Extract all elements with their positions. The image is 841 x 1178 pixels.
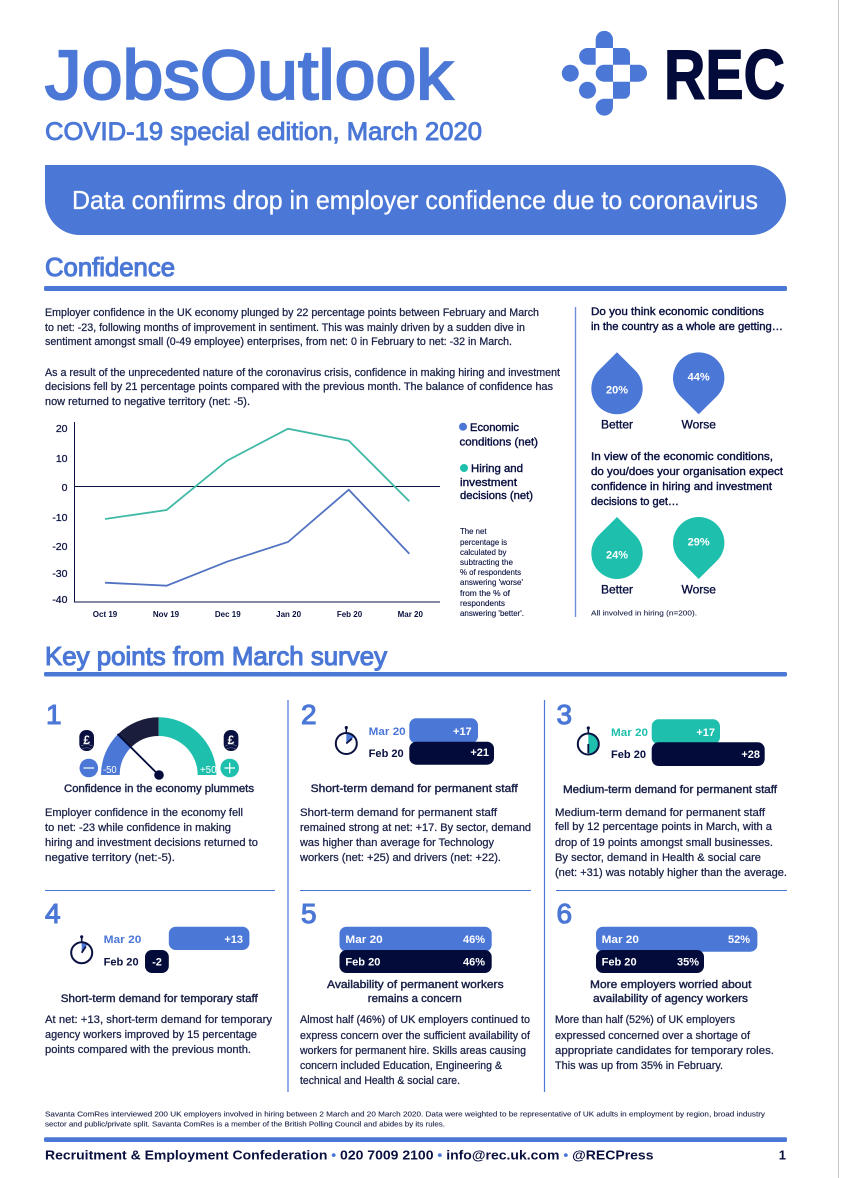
text block: By sector, demand in Health & social care [555, 852, 761, 864]
panel: key point 2: Short-term demand for permanent staff [311, 783, 518, 795]
bar chart: availability permanent: 46% [463, 934, 485, 946]
text block [299, 807, 531, 864]
base note: All involved in hiring (n=200). [591, 608, 697, 618]
note: net percentage definition [460, 527, 524, 618]
heading: Availability of permanent workers [327, 979, 504, 991]
text block: workers for permanent hire. Skills areas causing [299, 1045, 526, 1057]
line chart: net confidence: Feb 20 [337, 610, 363, 619]
text block: At net: +13, short-term demand for temporary [45, 1014, 273, 1026]
panel: key point 3 [555, 699, 787, 879]
text block: Employer confidence in the economy fell [45, 807, 243, 819]
text block: workers (net: +25) and drivers (net: +22). [299, 852, 501, 864]
text block: confidence summary: Employer confidence in the UK economy plunged by 22 percentage points between February and March [45, 307, 539, 319]
logo: REC [562, 31, 785, 116]
bar chart: availability agency: 35% [677, 956, 699, 968]
line chart: net confidence: -40 [52, 594, 68, 606]
icon: drop worse 29% [673, 517, 724, 596]
line chart: net confidence: 0 [62, 482, 68, 494]
legend: conditions (net) [460, 436, 538, 448]
text block: expressed concerned over a shortage of [555, 1030, 750, 1042]
panel: key point 3: 3 [556, 699, 572, 730]
footer: Recruitment & Employment Confederation • 020 7009 2100 • info@rec.uk.com • @RECPress [45, 1148, 654, 1162]
panel: key point 4: Short-term demand for temporary staff [61, 993, 258, 1005]
note: net percentage definition: % of respondents [460, 568, 521, 577]
question: hiring confidence: In view of the economic conditions, [591, 451, 773, 463]
text block: confidence summary: to net: -23, following months of improvement in sentiment. This was mainly driven by a sudden dive in [45, 322, 525, 334]
panel: expectation questions [576, 306, 783, 618]
legend: decisions (net) [460, 490, 533, 502]
icon: drop worse 44%: 44% [688, 372, 710, 384]
icon: drop better 20% [591, 352, 643, 432]
panel: key point 3: Medium-term demand for permanent staff [563, 784, 777, 796]
heading: Confidence: Confidence [45, 252, 175, 282]
bar chart: medium-term permanent [611, 719, 765, 766]
bar chart: medium-term permanent: +17 [696, 727, 715, 739]
bar chart: availability agency [596, 927, 757, 973]
icon: drop better 20%: Better [601, 418, 633, 432]
text block [45, 1014, 273, 1056]
line chart: net confidence: Mar 20 [398, 610, 424, 619]
heading: remains a concern [368, 993, 462, 1005]
text block: confidence summary: now returned to negative territory (net: -5). [45, 396, 250, 408]
legend: Hiring and [471, 463, 523, 475]
bar chart: short-term permanent [369, 718, 494, 765]
question: hiring confidence [591, 451, 783, 508]
bar chart: availability agency: Mar 20 [602, 934, 639, 946]
text block: confidence summary: sentiment amongst small (0-49 employee) enterprises, from net: 0 in February to net: -32 in March. [45, 336, 512, 348]
note: net percentage definition: answering 'better'. [460, 609, 524, 618]
text block: concern included Education, Engineering & [300, 1060, 502, 1072]
text block: Almost half (46%) of UK employers continued to [300, 1014, 530, 1026]
bar chart: availability permanent: Feb 20 [345, 956, 380, 968]
text block: Medium-term demand for permanent staff [555, 807, 765, 819]
bar chart: medium-term permanent: Mar 20 [611, 727, 648, 739]
chart: confidence gauge [101, 717, 217, 780]
panel: key point 4: 4 [45, 898, 61, 929]
panel: key point 1: 1 [46, 699, 62, 730]
legend [459, 422, 538, 502]
banner [45, 165, 786, 235]
text block: appropriate candidates for temporary roles. [555, 1045, 774, 1057]
panel: key point 2 [299, 699, 531, 864]
panel: key point 4 [45, 898, 273, 1056]
heading: Key points: Key points from March survey [45, 641, 387, 671]
icon: pound coin right: £ [228, 733, 235, 747]
panel: key point 2: 2 [301, 699, 317, 730]
bar chart: availability agency: Feb 20 [602, 956, 637, 968]
icon: stopwatch [336, 726, 357, 754]
text block: points compared with the previous month. [45, 1044, 251, 1056]
question: economic conditions: Do you think economic conditions [591, 306, 765, 318]
bar chart: short-term permanent: +21 [470, 747, 489, 759]
bar chart: short-term temporary [104, 927, 249, 973]
icon: drop worse 29%: 29% [688, 536, 710, 548]
note: net percentage definition: subtracting the [460, 558, 513, 567]
icon: pound coin left [79, 730, 94, 751]
text block: confidence summary [45, 307, 560, 408]
text block: hiring and investment decisions returned to [45, 837, 258, 849]
methodology note: Savanta ComRes interviewed 200 UK employers involved in hiring between 2 March and 20 March 2020. Data were weighted to be representative of UK adults in employment by region, broad industry [45, 1110, 765, 1118]
icon: stopwatch [71, 935, 92, 963]
line chart: net confidence: Jan 20 [276, 610, 302, 619]
subtitle: COVID-19 special edition, March 2020 [45, 118, 482, 146]
question: hiring confidence: do you/does your organisation expect [591, 466, 783, 478]
panel: key point 6 [555, 898, 774, 1072]
methodology note: sector and public/private split. Savanta ComRes is a member of the British Polling Council and abides by its rules. [45, 1120, 445, 1128]
note: net percentage definition: respondents [460, 599, 505, 608]
text block: drop of 19 points amongst small businesses. [555, 837, 773, 849]
icon: plus [220, 759, 239, 777]
text block: negative territory (net:-5). [45, 852, 175, 864]
note: net percentage definition: from the % of [460, 589, 511, 598]
text block: This was up from 35% in February. [555, 1060, 723, 1072]
line chart: net confidence: Oct 19 [93, 610, 118, 619]
bar chart: short-term permanent: Feb 20 [369, 748, 404, 760]
logo: REC: REC [664, 36, 785, 114]
icon: drop better 24% [591, 517, 643, 596]
chart: confidence gauge: -50 [103, 765, 117, 776]
text block: express concern over the sufficient availability of [300, 1030, 530, 1042]
panel: key point 1 [45, 699, 258, 864]
text block: technical and Health & social care. [300, 1075, 460, 1087]
bar chart: short-term permanent: Mar 20 [369, 726, 406, 738]
line chart: net confidence: -20 [52, 541, 68, 553]
legend: investment [460, 477, 517, 489]
icon: drop worse 44% [673, 352, 724, 432]
bar chart: availability agency: 52% [728, 934, 750, 946]
line: economic conditions [105, 490, 409, 586]
text block: (net: +31) was notably higher than the average. [555, 867, 787, 879]
bar chart: short-term permanent: +17 [453, 726, 472, 738]
footer: 1 [779, 1148, 786, 1162]
chart: confidence gauge: +50 [200, 765, 217, 776]
text block: confidence summary: decisions fell by 21 percentage points compared with the previous month. The balance of confidence has [45, 381, 553, 393]
bar chart: availability permanent [340, 927, 492, 973]
heading: More employers worried about [590, 979, 751, 991]
bar chart: short-term temporary: -2 [152, 956, 162, 968]
line chart: net confidence: Nov 19 [153, 610, 180, 619]
text block: was higher than average for Technology [299, 837, 495, 849]
icon: stopwatch [578, 726, 599, 754]
line chart: net confidence: 20 [56, 423, 68, 435]
title: JobsOutlook [45, 36, 454, 114]
text block: Short-term demand for permanent staff [300, 807, 497, 819]
panel: key point 1: Confidence in the economy plummets [64, 783, 254, 795]
note: net percentage definition: The net [460, 527, 487, 536]
panel: key point 5: 5 [301, 898, 317, 929]
text block: More than half (52%) of UK employers [555, 1014, 735, 1026]
heading: Confidence [44, 252, 787, 291]
note: net percentage definition: percentage is [460, 538, 507, 547]
icon: drop worse 29%: Worse [681, 582, 716, 596]
line chart: net confidence: 10 [56, 453, 68, 465]
bar chart: short-term temporary: Feb 20 [104, 956, 139, 968]
line chart: net confidence: -10 [52, 512, 68, 524]
text block: to net: -23 while confidence in making [45, 822, 231, 834]
question: economic conditions [591, 306, 783, 333]
text block [45, 807, 258, 864]
text block [555, 807, 787, 879]
line chart: net confidence: Dec 19 [215, 610, 241, 619]
heading: Key points [44, 641, 787, 676]
legend: Economic [470, 422, 520, 434]
line chart: net confidence [52, 422, 440, 619]
heading [327, 979, 504, 1005]
footer [44, 1137, 787, 1162]
line chart: net confidence: -30 [52, 568, 68, 580]
note: net percentage definition: calculated by [460, 548, 507, 557]
bar chart: availability permanent: 46% [463, 956, 485, 968]
panel: key point 5 [299, 898, 530, 1087]
question: economic conditions: in the country as a whole are getting… [591, 321, 783, 333]
banner: Data confirms drop in employer confidence due to coronavirus [72, 185, 758, 215]
text block: remained strong at net: +17. By sector, demand [300, 822, 531, 834]
text block [555, 1014, 774, 1072]
icon: drop better 20%: 20% [606, 384, 628, 396]
icon: drop better 24%: Better [601, 582, 633, 596]
panel: key point 6: 6 [556, 898, 572, 929]
text block: confidence summary: As a result of the unprecedented nature of the coronavirus crisis, confidence in making hiring and investment [45, 367, 560, 379]
icon: minus [80, 759, 98, 777]
bar chart: medium-term permanent: +28 [741, 749, 760, 761]
icon: pound coin right [224, 730, 238, 751]
icon: drop better 24%: 24% [606, 550, 628, 562]
question: hiring confidence: decisions to get… [591, 496, 679, 508]
line: hiring and investment decisions [105, 429, 409, 519]
note: net percentage definition: answering 'worse' [460, 578, 524, 587]
bar chart: short-term temporary: +13 [224, 934, 243, 946]
question: hiring confidence: confidence in hiring and investment [591, 481, 772, 493]
heading: availability of agency workers [593, 993, 748, 1005]
icon: drop worse 44%: Worse [681, 418, 716, 432]
methodology note [45, 1110, 765, 1128]
text block [299, 1014, 530, 1087]
heading [590, 979, 751, 1005]
icon: pound coin left: £ [83, 733, 90, 747]
text block: fell by 12 percentage points in March, with a [555, 821, 772, 833]
text block: agency workers improved by 15 percentage [45, 1029, 257, 1041]
bar chart: short-term temporary: Mar 20 [104, 934, 141, 946]
bar chart: availability permanent: Mar 20 [345, 934, 383, 946]
bar chart: medium-term permanent: Feb 20 [611, 749, 646, 761]
